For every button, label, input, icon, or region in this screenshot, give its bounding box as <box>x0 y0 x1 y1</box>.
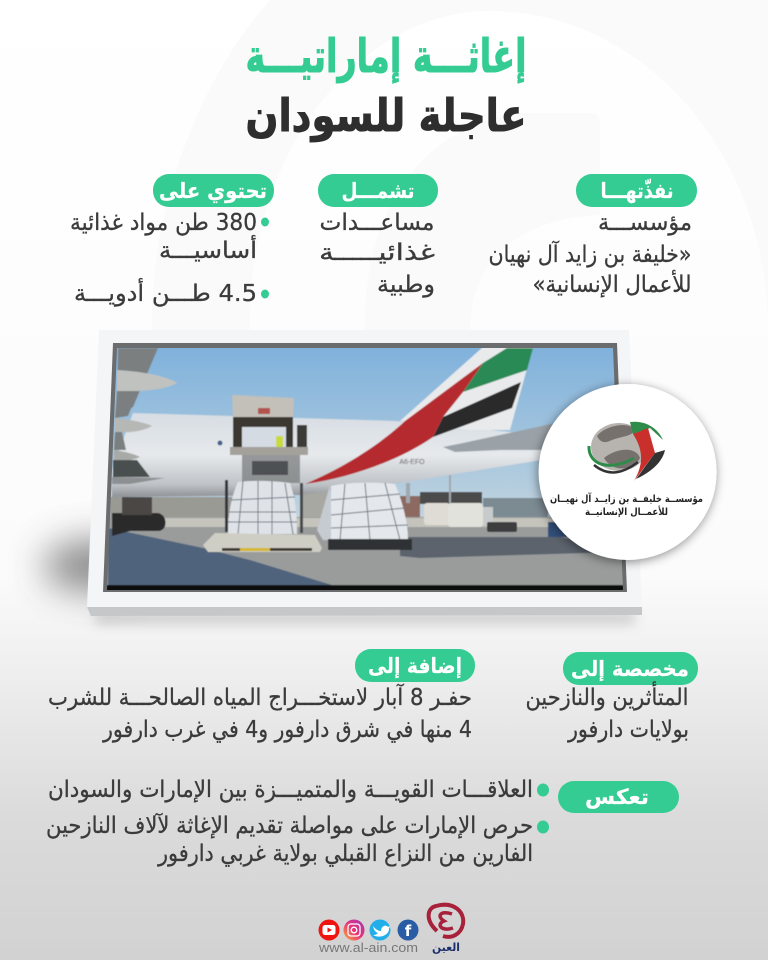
list: contents: 4.5 طـــن أدويـــة <box>74 278 257 307</box>
list: reflections: حرص الإمارات على مواصلة تقديم الإغاثة لآلاف النازحين <box>46 812 533 839</box>
icon: youtube <box>318 920 340 940</box>
text: aid types: مساعـــدات <box>320 210 434 236</box>
pill: contains: تحتوي على <box>159 179 267 204</box>
list: reflections: الفارين من النزاع القبلي بولاية غربي دارفور <box>157 841 533 867</box>
tail fin <box>400 347 533 430</box>
text: wells: حفـر 8 آبار لاستخـــراج المياه الصالحـــة للشرب <box>48 683 472 711</box>
pill: intended for: مخصصة إلى <box>571 657 689 681</box>
panel: reflects <box>46 777 679 867</box>
text: beneficiaries: بولايات دارفور <box>567 717 689 743</box>
lift loader and door <box>232 395 294 419</box>
pill: contains <box>153 174 274 207</box>
text: wells <box>48 683 472 743</box>
text: aid types: وطبية <box>377 272 435 298</box>
list: reflections: العلاقـــات القويـــة والمتميـــزة بين الإمارات والسودان <box>48 777 533 803</box>
title line 2: عاجلة للسودان <box>246 89 526 142</box>
sky <box>100 345 630 520</box>
landing gear <box>112 513 166 536</box>
panel: executed by <box>488 174 697 298</box>
distant airport <box>110 497 240 519</box>
list: contents <box>70 210 269 307</box>
ground <box>100 517 630 589</box>
distant pallets and vehicles <box>424 503 450 525</box>
text: foundation name: «خليفة بن زايد آل نهيان <box>488 240 692 268</box>
white frame <box>87 330 642 616</box>
text: wells: 4 منها في شرق دارفور و4 في غرب دارفور <box>102 717 472 743</box>
icon: instagram <box>344 920 364 940</box>
list: contents: أساسيـــة <box>159 235 257 264</box>
panel: in addition to <box>48 649 475 743</box>
foundation logo badge <box>539 384 717 560</box>
icon: twitter <box>370 920 390 940</box>
aircraft registration: A6-EFO <box>399 459 425 466</box>
bottom dark edge <box>107 584 623 590</box>
pill: executed by: نفذّتهـــا <box>600 178 674 203</box>
icon: globe emblem <box>589 422 665 481</box>
cargo pallet 2 <box>317 483 408 540</box>
text: aid types <box>319 210 435 298</box>
title <box>246 29 526 142</box>
cargo pallet 1 <box>228 481 297 534</box>
framed photo <box>43 330 642 624</box>
logo text: مؤسســة خليفــة بن زايــد آل نهيــان <box>550 492 703 505</box>
website url: www.al-ain.com <box>318 940 418 955</box>
title line 1: إغاثـــة إماراتيـــة <box>246 29 526 84</box>
panel: contains <box>70 174 274 307</box>
stabilizer <box>443 422 560 452</box>
frame shadow <box>43 540 635 624</box>
text: foundation name: للأعمال الإنسانية» <box>532 270 692 298</box>
footer <box>318 905 463 955</box>
pill: intended for <box>563 652 698 685</box>
wing and engines <box>117 348 158 408</box>
pill: includes: تشمـــل <box>342 179 414 203</box>
panel: includes <box>318 174 438 298</box>
text: foundation name: مؤسســـة <box>598 210 692 236</box>
icon: facebook: f <box>405 922 412 940</box>
list: reflections <box>46 777 549 867</box>
icon: facebook <box>398 920 418 940</box>
pill: in addition to: إضافة إلى <box>368 654 462 678</box>
logo text: للأعمــال الإنسانيــة <box>585 505 668 518</box>
loader base <box>203 533 322 552</box>
photo: cargo plane at airport <box>100 345 630 593</box>
pill: reflects <box>558 781 679 813</box>
text: aid types: غذائيـــــة <box>319 240 435 266</box>
pill: reflects: تعكس <box>585 785 649 809</box>
logo text <box>550 492 703 518</box>
text: foundation name <box>488 210 692 298</box>
pill: executed by <box>576 174 697 207</box>
panel: intended for <box>526 652 698 743</box>
icon: Al-Ain logo: العين <box>432 941 460 954</box>
list: contents: 380 طن مواد غذائية <box>70 210 257 236</box>
text: beneficiaries <box>526 681 689 743</box>
fuselage <box>112 413 560 497</box>
text: beneficiaries: المتأثرين والنازحين <box>526 681 688 711</box>
pill: in addition to <box>355 649 475 682</box>
icon: Al-Ain logo <box>429 905 463 954</box>
